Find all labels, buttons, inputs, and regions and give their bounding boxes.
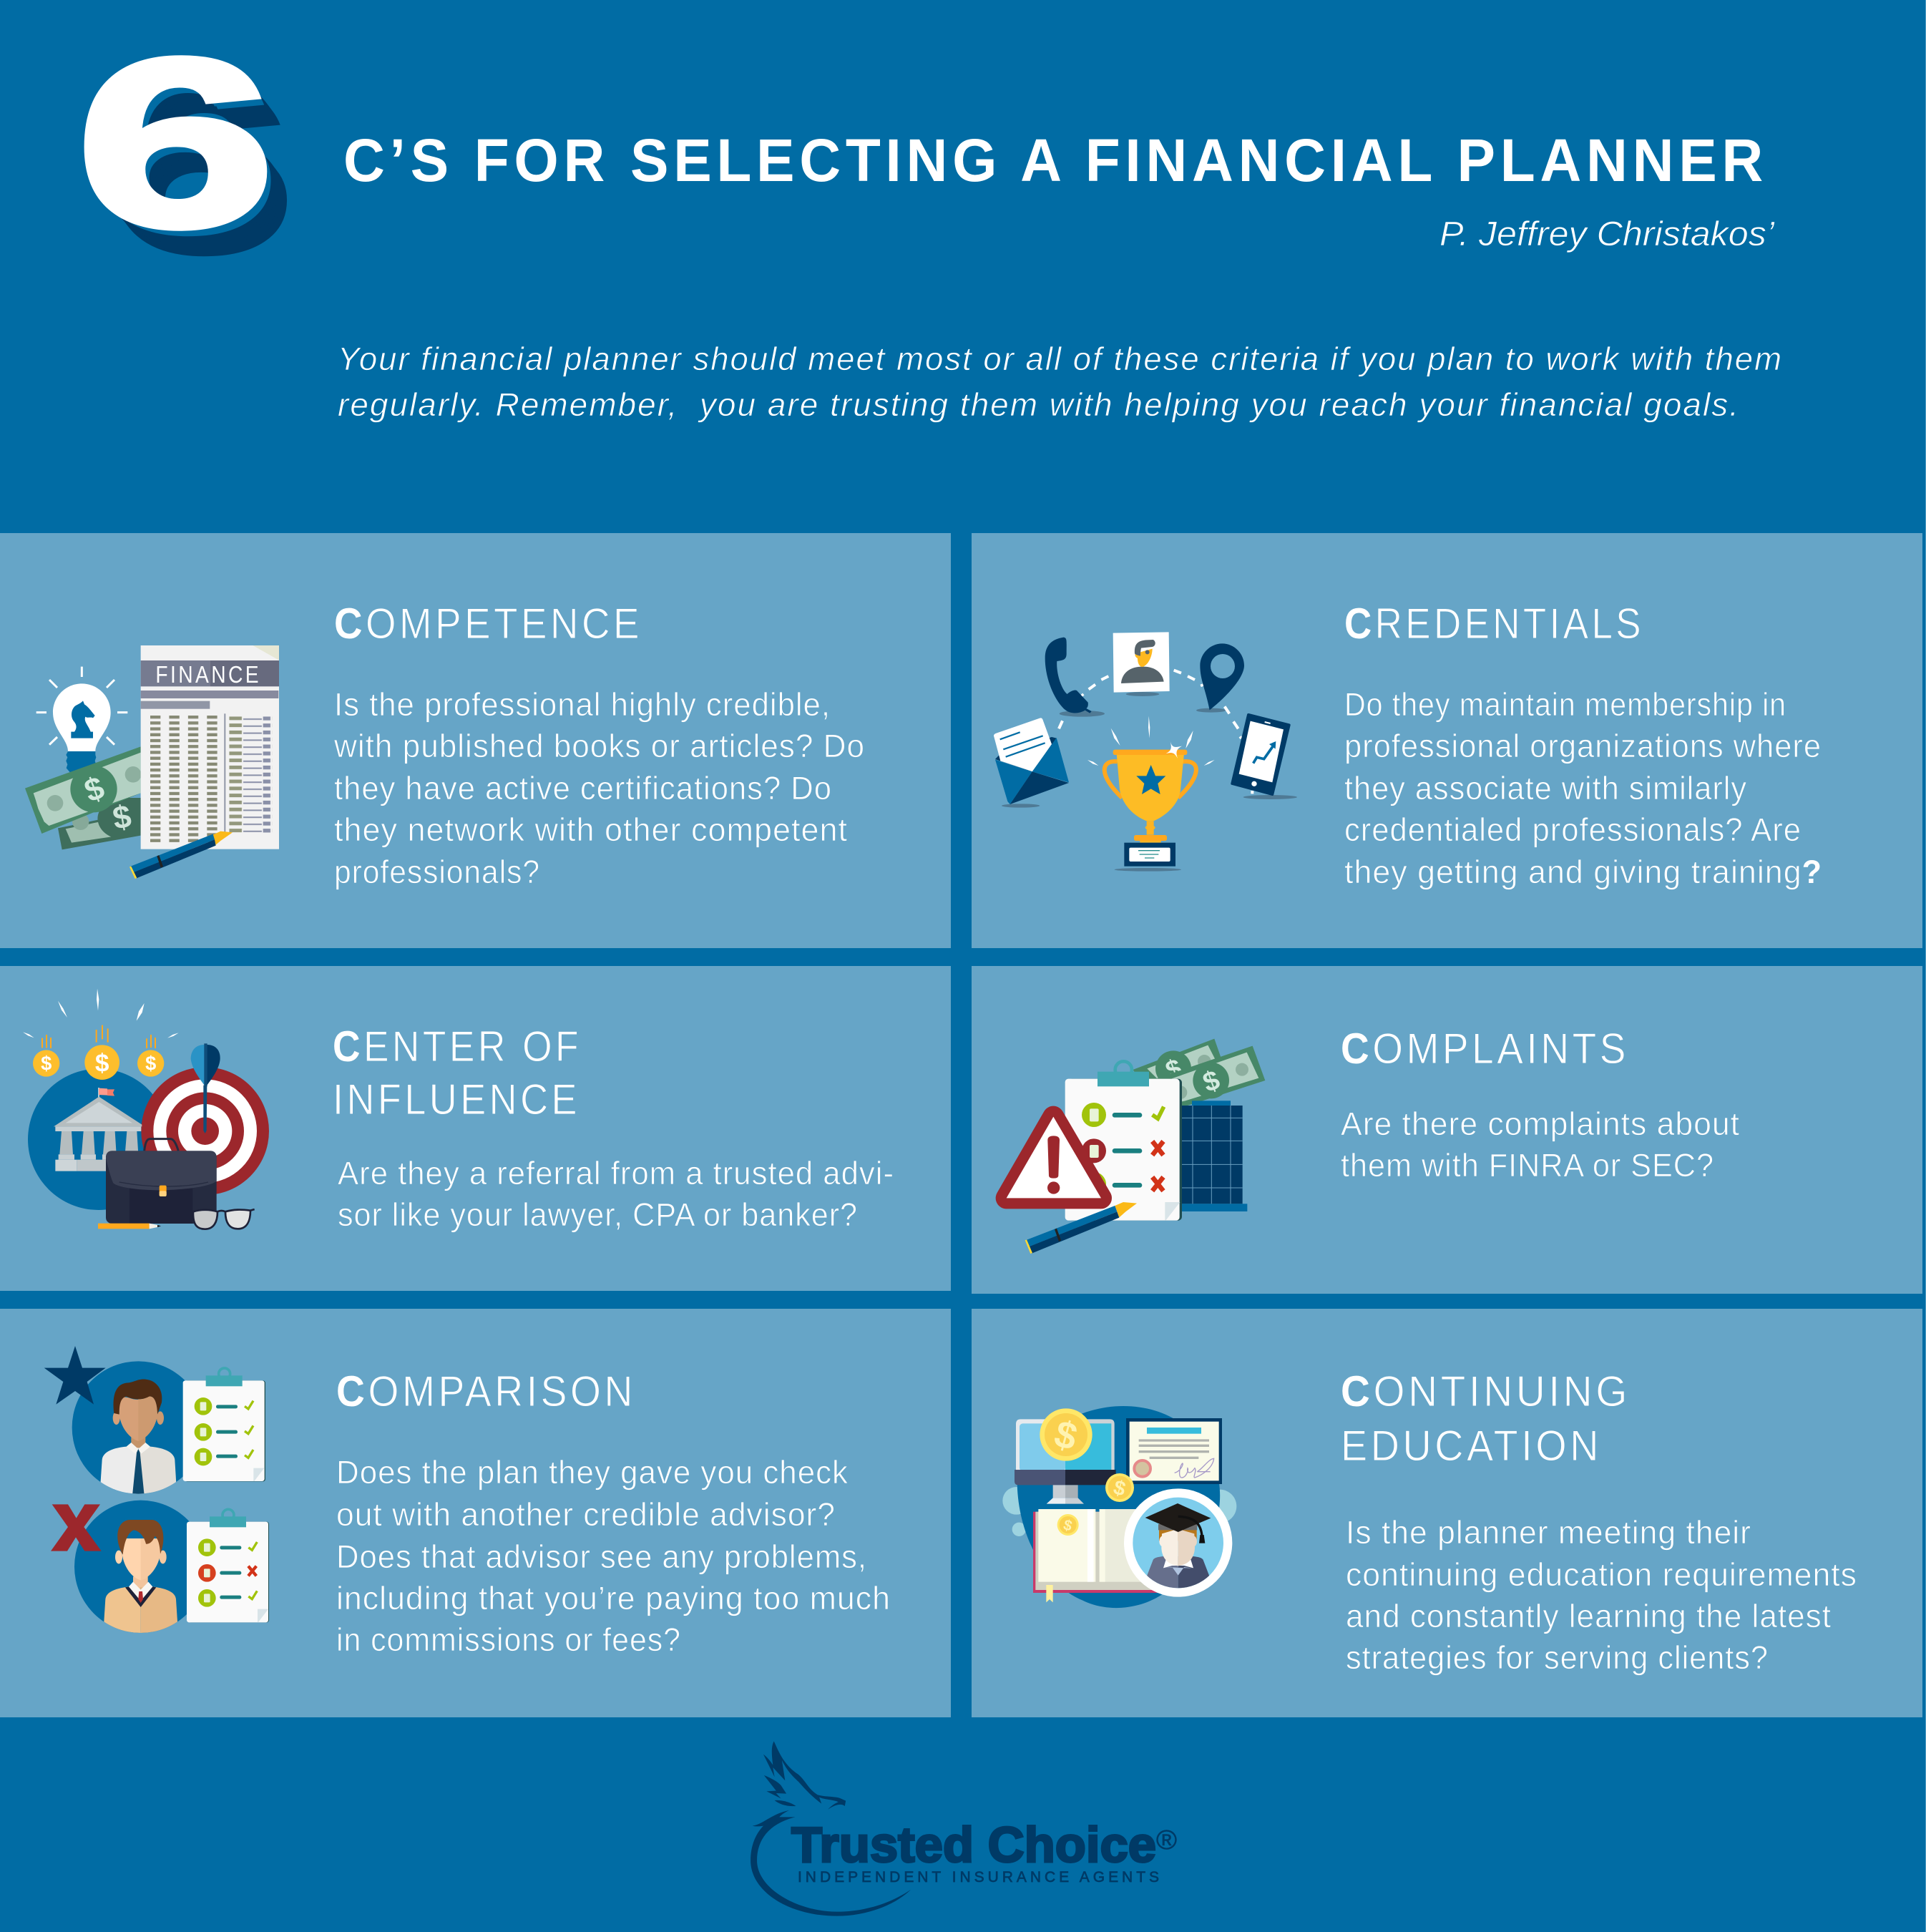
registered mark: ® <box>1156 1825 1177 1855</box>
icon: fountain pen <box>129 831 233 879</box>
text: competence <box>333 686 865 890</box>
text: complaints <box>1341 1106 1740 1184</box>
text: continuing education: strategies for serving clients? <box>1346 1639 1769 1676</box>
logo wordmark: Trusted Choice <box>791 1817 1156 1873</box>
icon: bank, target, briefcase and coins <box>23 989 269 1229</box>
icon: open book: $ <box>1062 1517 1074 1535</box>
heading: center of influence <box>333 1023 582 1123</box>
text: complaints: them with FINRA or SEC? <box>1341 1147 1714 1184</box>
icon: coin small <box>1105 1473 1134 1502</box>
icon: warning, checklist, building and money <box>1007 1039 1265 1254</box>
icon: coin large: $ <box>1050 1413 1082 1459</box>
intro text: Your financial planner should meet most or all of these criteria if you plan to work with them <box>338 341 1783 377</box>
icon: certificate <box>1126 1418 1222 1484</box>
icon: banknotes: $ <box>1199 1065 1224 1098</box>
icon: coins: $ <box>145 1053 156 1075</box>
text: competence: they have active certifications? Do <box>334 770 832 806</box>
text: comparison: Does that advisor see any problems, <box>336 1538 867 1575</box>
logo: eagle and swoosh <box>751 1741 911 1916</box>
text: complaints: Are there complaints about <box>1341 1106 1740 1142</box>
logo: Trusted Choice <box>751 1741 1177 1916</box>
icon: coin large <box>1040 1408 1092 1461</box>
icon: dart <box>191 1043 220 1133</box>
panel: comparison <box>0 1309 951 1717</box>
icon: glasses <box>193 1209 255 1229</box>
heading: continuing education <box>1341 1367 1631 1470</box>
text: comparison: in commissions or fees? <box>336 1621 681 1658</box>
icon: pencil <box>98 1224 161 1229</box>
icon: star <box>44 1346 106 1405</box>
icon: education, monitor, book and graduate <box>1002 1406 1236 1608</box>
icon: bad advisor <box>74 1500 190 1633</box>
text: credentials: Do they maintain membership in <box>1344 686 1786 723</box>
title: C’S FOR SELECTING A FINANCIAL PLANNER <box>343 127 1768 194</box>
icon: two advisors with checklists <box>44 1346 269 1636</box>
text: credentials <box>1344 686 1822 890</box>
icon: back banknote <box>58 798 141 849</box>
logo tagline: INDEPENDENT INSURANCE AGENTS <box>798 1869 1159 1885</box>
intro text: regularly. Remember, you are trusting them with helping you reach your financial goals. <box>338 386 1740 423</box>
text: credentials: they getting and giving training? <box>1344 854 1822 890</box>
icon: computer monitor <box>1015 1419 1116 1504</box>
icon: coin small: $ <box>1111 1476 1128 1501</box>
text: competence: they network with other competent <box>334 811 848 848</box>
heading: complaints: COMPLAINTS <box>1341 1025 1629 1073</box>
text: credentials: professional organizations where <box>1344 728 1822 764</box>
panel: competence <box>0 533 951 948</box>
panel: complaints <box>972 966 1922 1294</box>
text: competence: professionals? <box>334 854 540 890</box>
text: center of influence: Are they a referral from a trusted advi- <box>338 1155 894 1191</box>
icon: map pin <box>1200 643 1244 710</box>
icon: warning triangle <box>1007 1117 1101 1198</box>
icon: finance document: FINANCE <box>155 662 261 688</box>
heading: credentials: CREDENTIALS <box>1344 600 1644 648</box>
text: comparison: Does the plan they gave you check <box>336 1454 849 1491</box>
icon: briefcase <box>106 1139 217 1224</box>
heading: continuing education: EDUCATION <box>1341 1422 1602 1470</box>
heading: center of influence: CENTER OF <box>333 1023 582 1070</box>
text: continuing education: Is the planner meeting their <box>1346 1514 1751 1551</box>
text: credentials: credentialed professionals? Are <box>1344 811 1802 848</box>
icon: light bulb with chess knight <box>36 667 127 773</box>
icon: good advisor <box>72 1361 185 1494</box>
icon: open book <box>1033 1509 1162 1602</box>
text: comparison: out with another credible advisor? <box>336 1496 836 1533</box>
author byline: P. Jeffrey Christakos’ <box>1439 215 1775 253</box>
icon: office building <box>1182 1101 1247 1211</box>
heading: comparison: COMPARISON <box>336 1367 636 1415</box>
text: comparison: including that you’re paying too much <box>336 1580 891 1616</box>
icon: graduate portrait <box>1124 1488 1232 1597</box>
text: competence: Is the professional highly credible, <box>334 686 831 723</box>
icon: front banknote: $ <box>79 769 109 809</box>
icon: bank building <box>54 1088 142 1171</box>
icon: telephone <box>1045 638 1092 713</box>
text: center of influence: sor like your lawyer, CPA or banker? <box>338 1196 858 1233</box>
text: continuing education: continuing education requirements <box>1346 1556 1857 1593</box>
icon: back banknote: $ <box>110 798 134 836</box>
text: continuing education <box>1346 1514 1857 1676</box>
text: competence: with published books or articles? Do <box>333 728 865 764</box>
panel: continuing education <box>972 1309 1922 1717</box>
big number 6: 6 <box>76 9 275 276</box>
panel: center of influence <box>0 966 951 1291</box>
icon: red X <box>51 1504 102 1551</box>
icon: trophy <box>1105 741 1196 867</box>
heading: competence: COMPETENCE <box>334 600 642 648</box>
icon: tablet with chart <box>1232 715 1289 794</box>
heading: center of influence: INFLUENCE <box>333 1075 580 1123</box>
icon: coins: $ <box>41 1053 52 1075</box>
icon: banknotes: $ <box>1162 1053 1186 1085</box>
icon: envelope <box>994 718 1069 804</box>
icon: fountain pen <box>1025 1202 1137 1254</box>
icon: trophy with contact icons <box>994 632 1297 872</box>
icon: profile photo <box>1113 632 1170 693</box>
icon: clipboard with one fail <box>187 1509 269 1622</box>
text: comparison <box>336 1454 891 1658</box>
icon: coins: $ <box>95 1049 109 1077</box>
text: center of influence <box>338 1155 894 1233</box>
panel: credentials <box>972 533 1922 948</box>
icon: clipboard all checks <box>183 1368 265 1481</box>
intro text <box>338 341 1783 423</box>
text: continuing education: and constantly learning the latest <box>1346 1598 1832 1634</box>
icon: finance document <box>141 645 279 849</box>
icon: front banknote <box>25 746 141 834</box>
icon: finance report, bulb and money <box>25 645 279 879</box>
heading: continuing education: CONTINUING <box>1341 1367 1631 1415</box>
text: credentials: they associate with similarly <box>1344 770 1747 806</box>
icon: target <box>141 1067 269 1195</box>
icon: clipboard checklist <box>1065 1061 1182 1221</box>
icon: banknotes <box>1133 1039 1265 1114</box>
icon: coins <box>33 1025 164 1080</box>
